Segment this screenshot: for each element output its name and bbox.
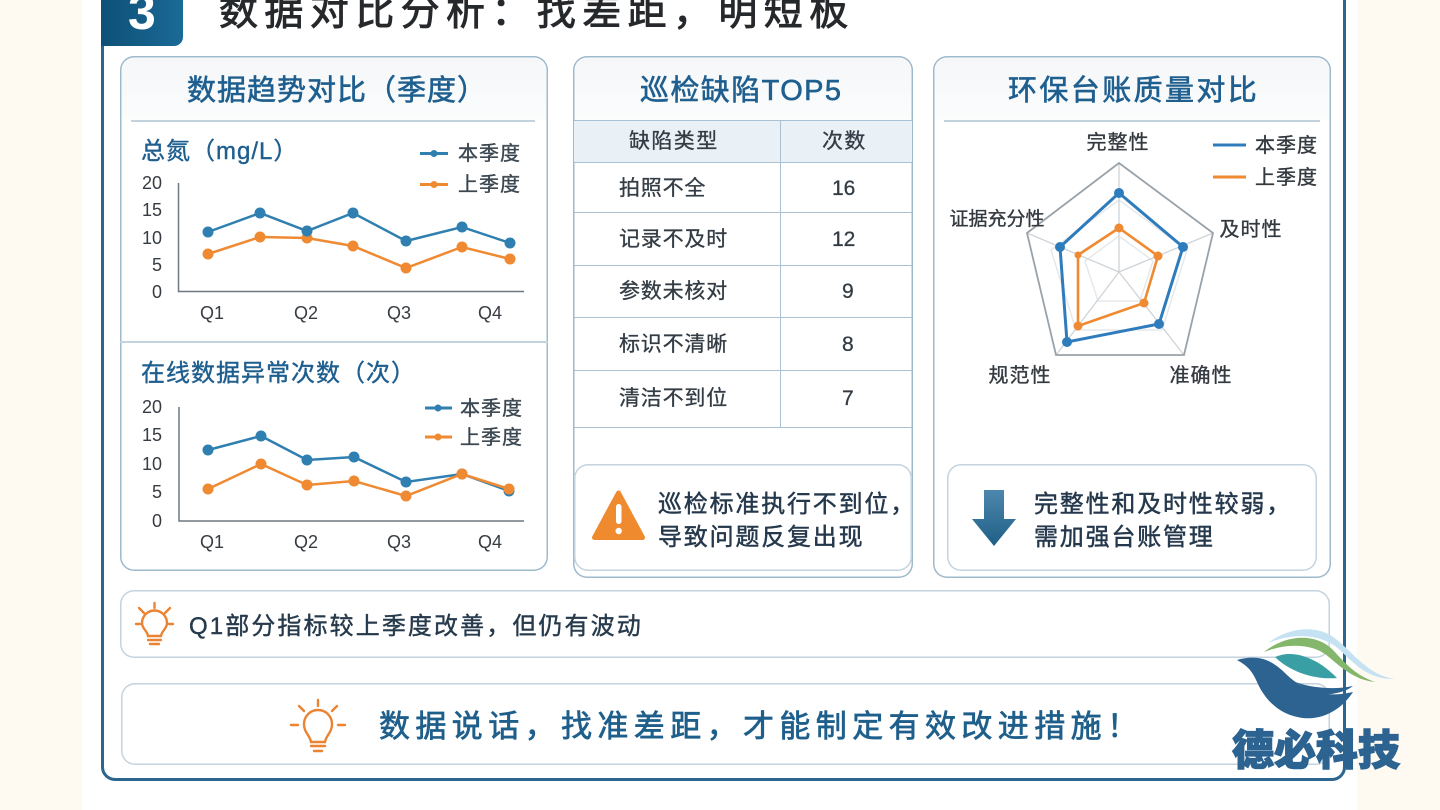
line chart: online anomalies: 15 bbox=[142, 425, 162, 445]
radar chart: ledger quality: 及时性 bbox=[1220, 218, 1282, 241]
callout text bbox=[1034, 491, 1292, 551]
panel header background bbox=[935, 58, 1329, 120]
icon: warning triangle bbox=[592, 490, 645, 540]
line chart: online anomalies bbox=[142, 397, 524, 552]
panel: top 5 inspection defects bbox=[573, 56, 913, 578]
line chart: online anomalies: 10 bbox=[142, 454, 162, 474]
line chart: total nitrogen: Q1 bbox=[200, 303, 224, 323]
callout text: 巡检标准执行不到位， bbox=[658, 491, 916, 518]
column header: defect type: 缺陷类型 bbox=[629, 130, 719, 153]
line chart: online anomalies: Q1 bbox=[200, 532, 224, 552]
subheading: total nitrogen: 总氮（mg/L） bbox=[141, 138, 298, 165]
row 3 value: 9 bbox=[842, 280, 854, 303]
line chart: total nitrogen: 本季度 bbox=[458, 142, 521, 165]
row 3: 参数未核对 bbox=[619, 280, 728, 303]
line chart: online anomalies: Q2 bbox=[294, 532, 318, 552]
insight text: Q1部分指标较上季度改善，但仍有波动 bbox=[189, 613, 643, 640]
line chart: total nitrogen: Q4 bbox=[478, 303, 502, 323]
callout text bbox=[658, 491, 916, 551]
row 5 value: 7 bbox=[842, 387, 854, 410]
column header: count: 次数 bbox=[822, 130, 867, 153]
line chart: online anomalies: 20 bbox=[142, 397, 162, 417]
radar chart: ledger quality: 本季度 bbox=[1255, 134, 1318, 157]
line chart: online anomalies: 上季度 bbox=[460, 426, 523, 449]
panel header background bbox=[122, 58, 546, 120]
callout: weak completeness and timeliness bbox=[947, 464, 1317, 571]
table bbox=[574, 120, 912, 428]
panel header background bbox=[575, 58, 911, 120]
conclusion bar bbox=[121, 683, 1330, 765]
callout text: 导致问题反复出现 bbox=[658, 524, 864, 551]
line chart: online anomalies: Q3 bbox=[387, 532, 411, 552]
logo: Debi Technology bbox=[1232, 629, 1401, 774]
radar chart: ledger quality: 规范性 bbox=[988, 364, 1052, 387]
line chart: total nitrogen: 15 bbox=[142, 200, 162, 220]
line chart: total nitrogen: 5 bbox=[152, 255, 162, 275]
panel: ledger quality comparison bbox=[933, 56, 1331, 578]
line chart: total nitrogen: Q3 bbox=[387, 303, 411, 323]
callout: inspection standards bbox=[574, 464, 912, 571]
row 5: 清洁不到位 bbox=[619, 387, 728, 410]
radar chart: ledger quality: 上季度 bbox=[1255, 166, 1318, 189]
callout text: 完整性和及时性较弱， bbox=[1034, 491, 1292, 518]
subheading: online data anomalies: 在线数据异常次数（次） bbox=[141, 360, 416, 387]
row 2 value: 12 bbox=[832, 228, 855, 251]
row 1: 拍照不全 bbox=[619, 177, 706, 200]
icon: light bulb bbox=[134, 602, 174, 646]
radar chart: ledger quality bbox=[949, 131, 1318, 387]
icon: down arrow bbox=[972, 490, 1016, 546]
line chart: total nitrogen: 20 bbox=[142, 173, 162, 193]
line chart: total nitrogen: 0 bbox=[152, 282, 162, 302]
callout text: 需加强台账管理 bbox=[1034, 524, 1215, 551]
conclusion text: 数据说话，找准差距，才能制定有效改进措施！ bbox=[379, 709, 1143, 744]
line chart: total nitrogen bbox=[142, 142, 524, 323]
icon: light bulb bbox=[290, 698, 346, 752]
heading: top 5 defects: 巡检缺陷TOP5 bbox=[640, 75, 842, 107]
line chart: total nitrogen: 10 bbox=[142, 228, 162, 248]
line chart: total nitrogen: 上季度 bbox=[458, 173, 521, 196]
row 4: 标识不清晰 bbox=[619, 333, 728, 356]
row 2: 记录不及时 bbox=[619, 228, 728, 251]
logo wordmark: 德必科技 bbox=[1232, 727, 1400, 774]
radar chart: ledger quality: 准确性 bbox=[1170, 364, 1232, 387]
heading: trend comparison: 数据趋势对比（季度） bbox=[187, 75, 487, 107]
line chart: total nitrogen: Q2 bbox=[294, 303, 318, 323]
row 1 value: 16 bbox=[832, 177, 855, 200]
row 4 value: 8 bbox=[842, 333, 854, 356]
radar chart: ledger quality: 完整性 bbox=[1086, 131, 1150, 154]
panel: quarterly trend comparison bbox=[120, 56, 548, 571]
heading: ledger quality: 环保台账质量对比 bbox=[1008, 75, 1259, 107]
table header row bbox=[574, 120, 912, 162]
insight bar bbox=[120, 590, 1330, 658]
logo mark bbox=[1237, 629, 1394, 718]
line chart: online anomalies: Q4 bbox=[478, 532, 502, 552]
line chart: online anomalies: 5 bbox=[152, 482, 162, 502]
line chart: online anomalies: 本季度 bbox=[460, 397, 523, 420]
radar chart: ledger quality: 证据充分性 bbox=[949, 208, 1045, 230]
section number badge bbox=[101, 0, 183, 46]
line chart: online anomalies: 0 bbox=[152, 511, 162, 531]
